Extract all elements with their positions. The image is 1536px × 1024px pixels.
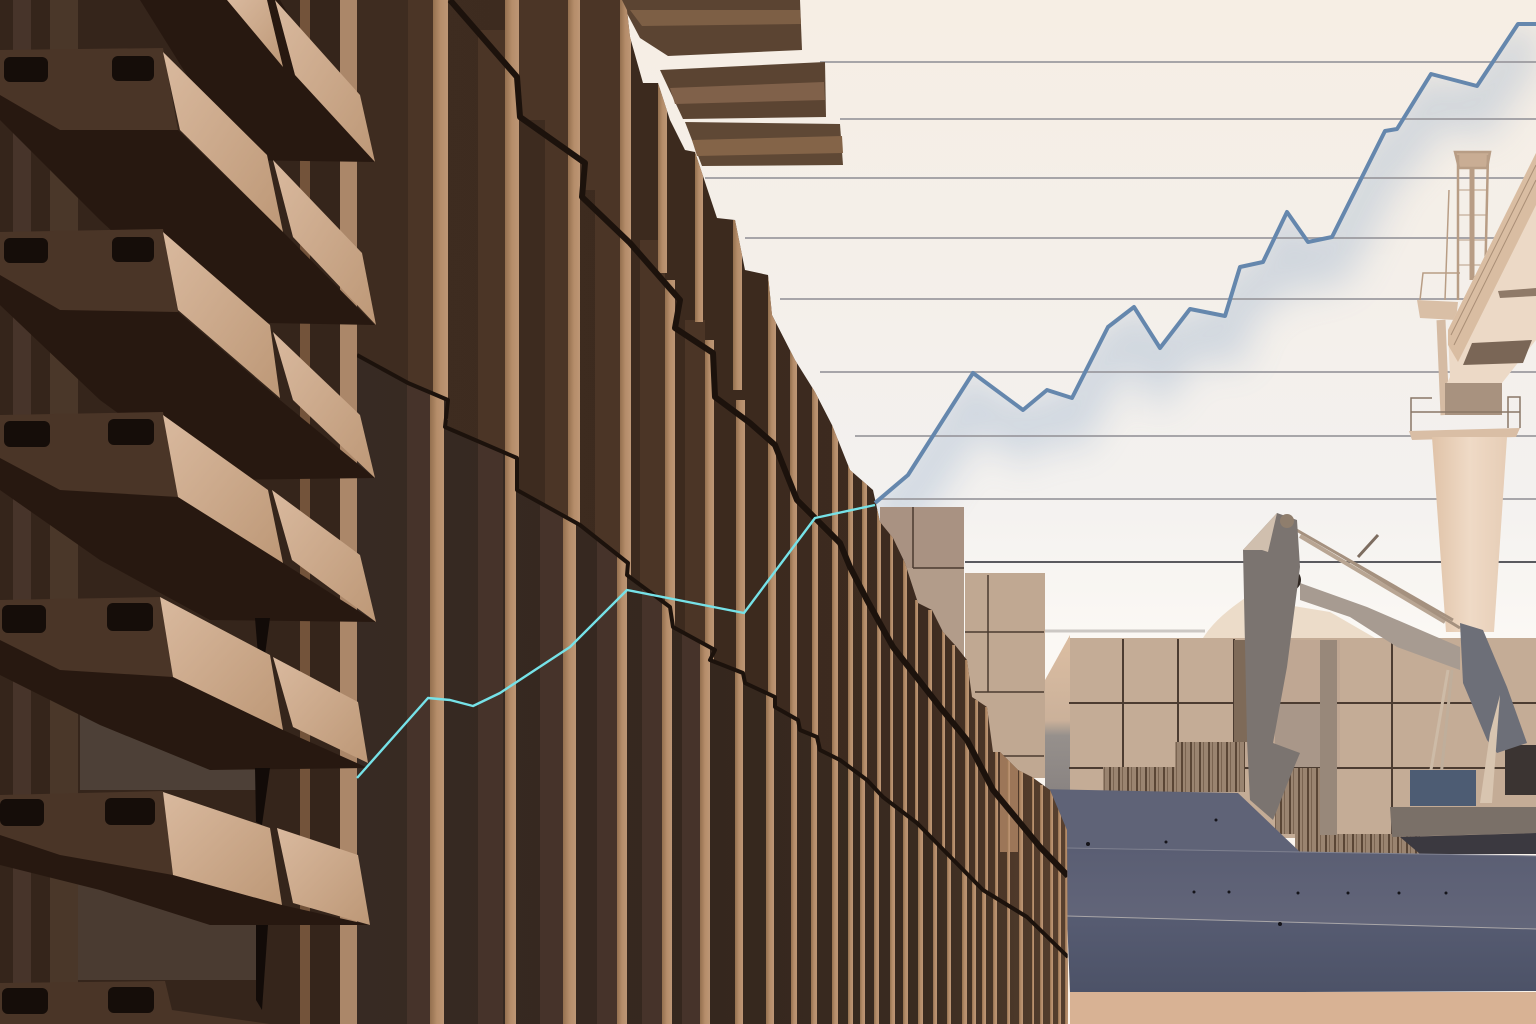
upper wall section (357, 0, 1068, 1024)
overhead stacked beams (620, 0, 843, 166)
beam row 6 (0, 925, 270, 1024)
excavator arm (1300, 583, 1460, 670)
tower platform (1409, 428, 1520, 440)
sheet pile wall (357, 0, 1068, 1024)
crane mast (1417, 152, 1490, 415)
lower wall section (407, 385, 1068, 1024)
rising price line: blue section over sky (875, 24, 1536, 503)
dome behind excavator (1203, 598, 1375, 638)
underside (140, 0, 375, 162)
ship hull (1037, 789, 1536, 993)
crane boom (1445, 153, 1536, 387)
excavator column (1243, 513, 1300, 820)
ground (1070, 992, 1536, 1024)
tower column (1432, 437, 1507, 632)
wall joints (357, 0, 1068, 957)
left stack: dark backing (0, 0, 357, 1024)
excavator cab (1410, 770, 1476, 806)
excavator struts (1293, 528, 1460, 805)
upper panel mid-tones (408, 0, 705, 650)
wood crates (1103, 640, 1420, 854)
port crane tower (1409, 152, 1536, 632)
chart: blue shading under line (875, 50, 1536, 525)
excavator leg (1460, 623, 1527, 753)
front face (0, 48, 178, 130)
stacked blocks behind wall (880, 507, 1045, 778)
rising price line: cyan section over wall (357, 505, 875, 778)
excavator base (1390, 807, 1536, 837)
beam row 3 (0, 412, 376, 622)
beam row 1 (0, 0, 376, 325)
chart grid lines (705, 62, 1536, 631)
beam row 4 (0, 597, 368, 770)
beam row 5 (0, 768, 370, 925)
beam row 2 (0, 229, 375, 480)
boom vent (1463, 340, 1532, 365)
container stack (1045, 598, 1536, 854)
excavator (1243, 513, 1536, 854)
